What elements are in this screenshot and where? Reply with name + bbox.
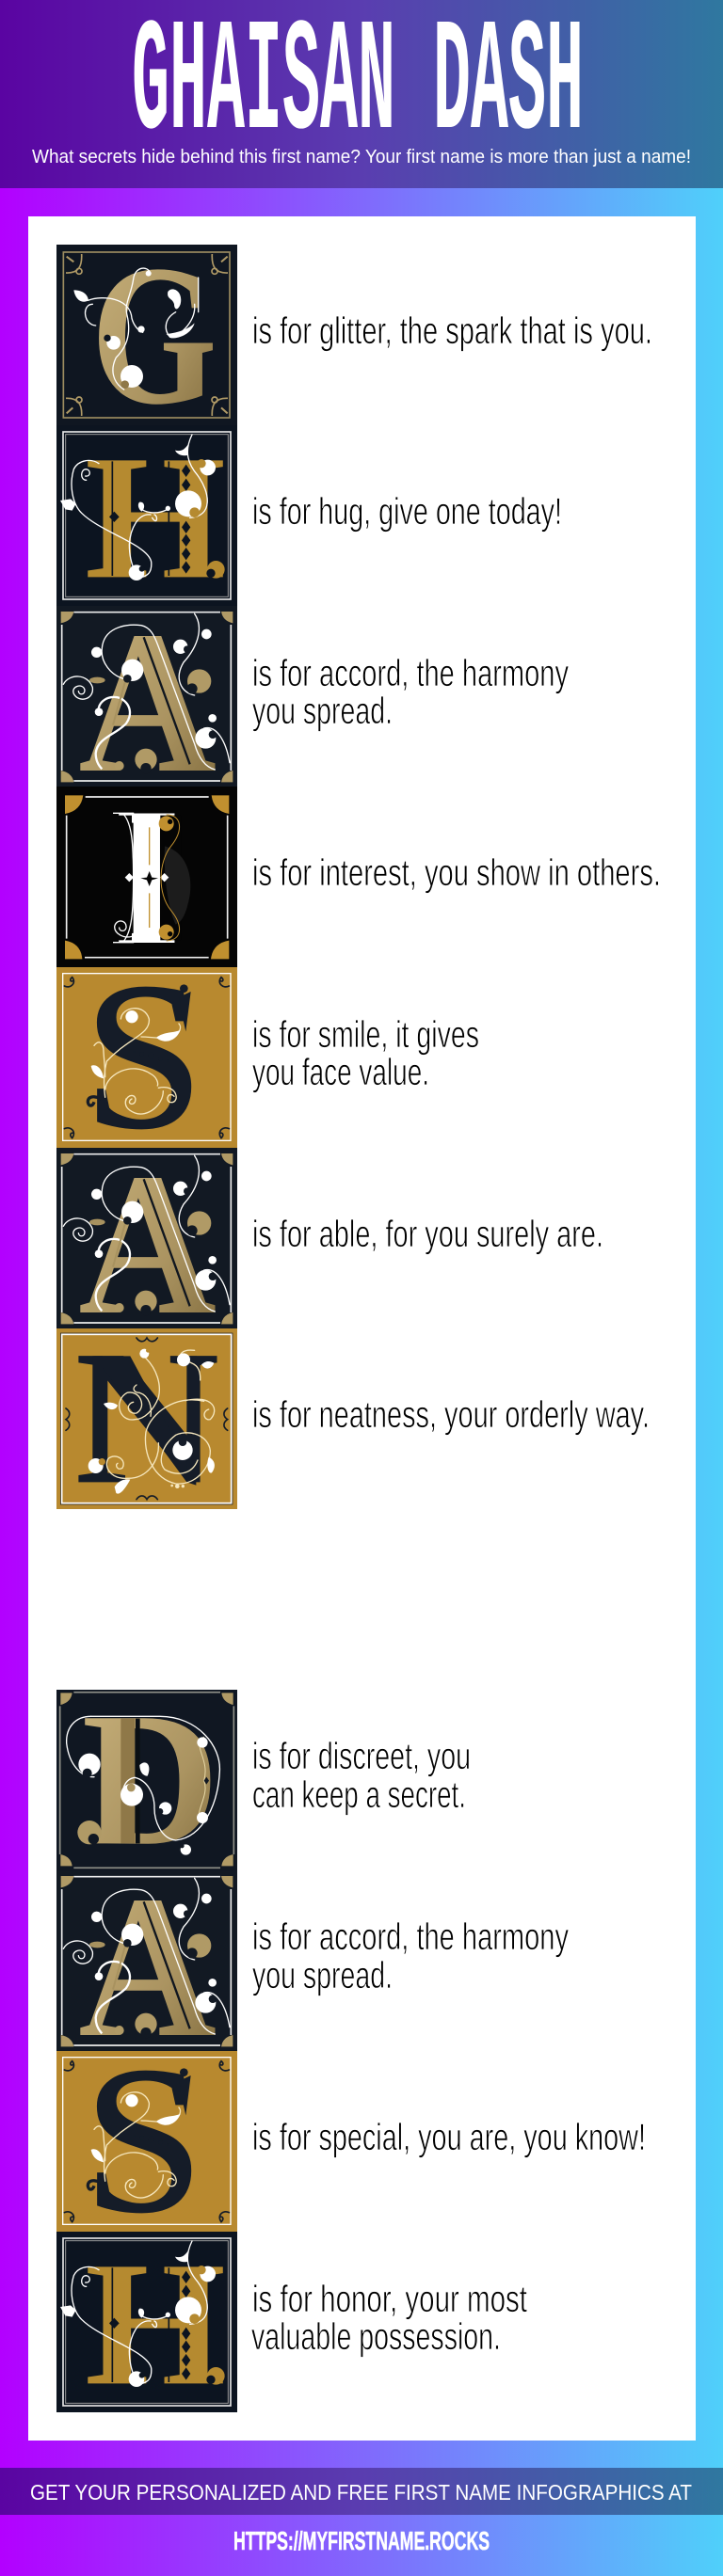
text: H: is for hug, give one today! xyxy=(252,491,562,533)
header band xyxy=(0,0,723,188)
row: A tile: A xyxy=(78,1131,217,1357)
text: H (honor) xyxy=(251,2279,527,2358)
white content panel xyxy=(28,216,696,2441)
row: G tile: G xyxy=(91,225,217,447)
row: H tile: H xyxy=(85,2224,226,2422)
text: H (honor): valuable possession. xyxy=(251,2316,501,2358)
row: N tile: N xyxy=(74,1311,219,1524)
text: A (accord, second): is for accord, the harmony xyxy=(252,1916,569,1958)
text: S (smile) xyxy=(252,1014,479,1093)
row: S tile: S xyxy=(83,940,204,1172)
row: S tile xyxy=(56,2024,237,2256)
row: I tile xyxy=(56,768,237,986)
subtitle: What secrets hide behind this first name? Your first name is more than just a name! xyxy=(32,147,691,167)
footer band xyxy=(0,2468,723,2515)
text: H (honor): is for honor, your most xyxy=(252,2279,527,2320)
row: A tile: A xyxy=(78,1853,217,2079)
row: S tile: S xyxy=(83,2024,204,2256)
text: D xyxy=(252,1736,471,1816)
text: D: can keep a secret. xyxy=(252,1774,466,1816)
row: A tile: A xyxy=(78,589,217,815)
text: A (accord): is for accord, the harmony xyxy=(252,653,569,694)
row: I tile: I xyxy=(113,768,181,986)
text: S (smile): is for smile, it gives xyxy=(252,1014,479,1056)
text: A (accord, second) xyxy=(252,1916,569,1996)
row: D tile: D xyxy=(82,1673,219,1884)
footer link: HTTPS://MYFIRSTNAME.ROCKS xyxy=(233,2526,490,2555)
text: S (smile): you face value. xyxy=(252,1052,429,1093)
text: D: is for discreet, you xyxy=(252,1736,471,1777)
text: A (accord, second): you spread. xyxy=(252,1955,393,1996)
row: H tile: H xyxy=(85,418,226,615)
row: S tile xyxy=(56,940,237,1172)
text: A (accord): you spread. xyxy=(252,691,393,732)
text: A (accord) xyxy=(252,653,569,732)
